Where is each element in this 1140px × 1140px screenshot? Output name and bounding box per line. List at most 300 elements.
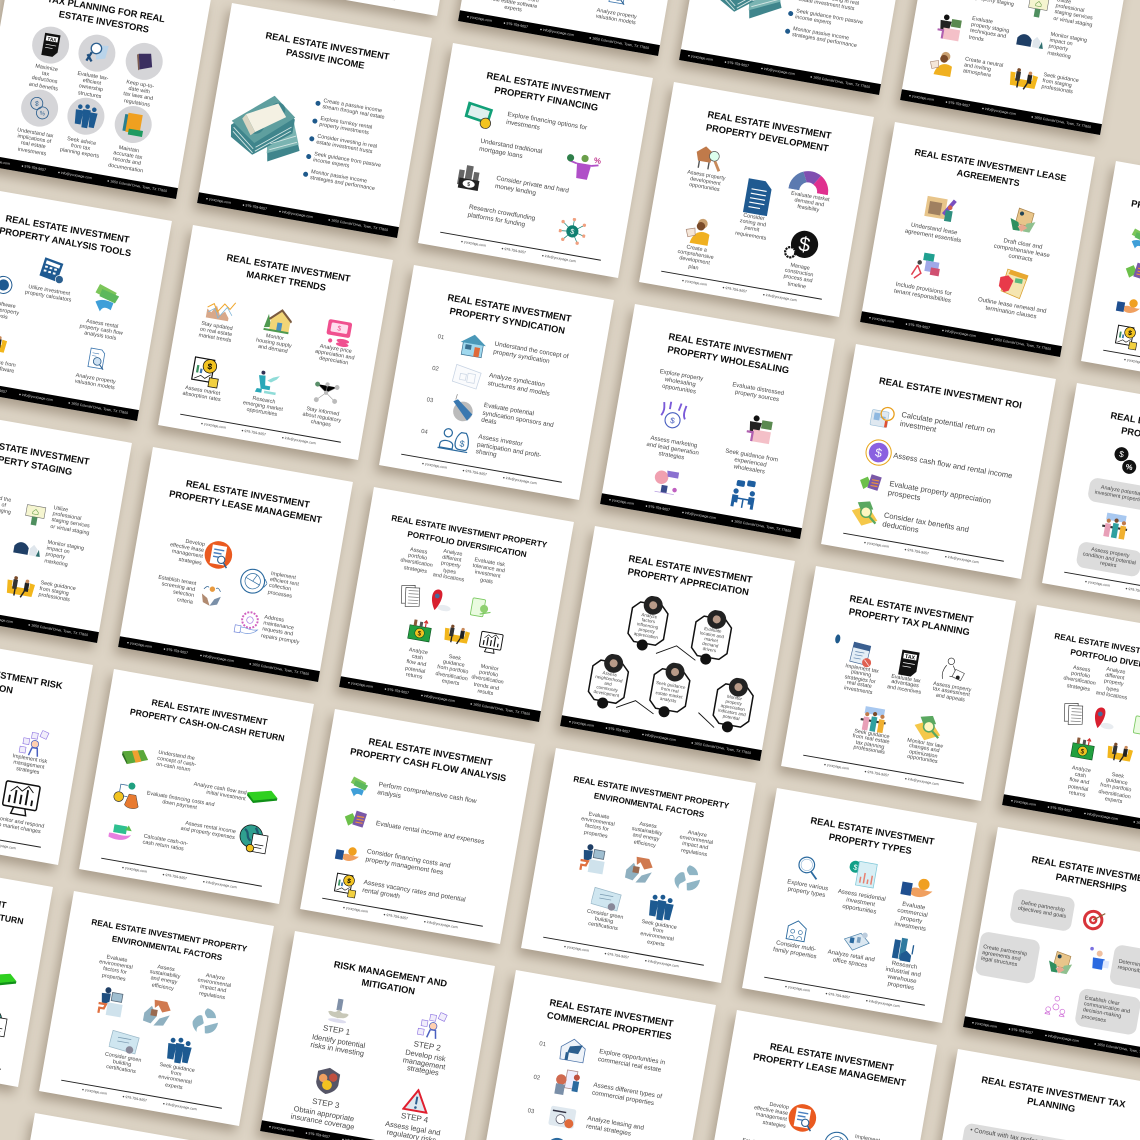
title [327, 728, 531, 788]
footer: ● 1650 Colonial Drive, Town, TX 77800 [107, 178, 167, 193]
text: warehouse: industrial and [885, 966, 921, 978]
text: cash flow: Assess cash flow and rental income [892, 450, 1013, 480]
card: property syndication [379, 265, 613, 499]
text: tax implications: Understand tax [17, 127, 54, 139]
text: monitor staging: Monitor staging impact on property marketing [1046, 31, 1087, 59]
text: tenant screening: criteria [176, 597, 193, 605]
text: renewal clauses: termination clauses [985, 305, 1037, 320]
card: property staging, top crop [900, 0, 1134, 134]
title: RISK MANAGEMENT AND [333, 959, 448, 988]
text: office spaces: office spaces [832, 957, 867, 969]
footer: ● info@yourpage.com [502, 475, 537, 485]
text: wholesaling opportunities: wholesaling [664, 377, 696, 388]
title: ESTATE INVESTORS [58, 8, 150, 34]
text: evaluate factors: environmental [580, 816, 615, 828]
footer [59, 1080, 222, 1119]
text: initial investment: initial investment [205, 790, 245, 803]
footer [320, 897, 482, 936]
footer: ● 979-759-9057 [904, 547, 929, 555]
icon: lease collage [922, 192, 958, 225]
text: tenant screening: selection [172, 590, 194, 599]
footer: ● yourpage.com [82, 1087, 107, 1096]
text: tax laws [123, 79, 155, 108]
text: residential [832, 888, 888, 917]
icon: coin stacks [457, 165, 480, 191]
icon disc [112, 103, 155, 145]
text: risk management: strategies [15, 766, 39, 776]
text: emerging: opportunities [245, 407, 277, 418]
text: insurance: Obtain appropriate [293, 1103, 355, 1123]
card: tax planning, bottom right [923, 1049, 1140, 1140]
icon: house [261, 306, 293, 336]
title: PROPERTY DEVELOPMENT [705, 122, 829, 153]
text: evaluate factors: Evaluate [106, 954, 128, 964]
title [106, 689, 310, 749]
text: cash flow returns [399, 646, 434, 681]
text: strategies: Assess [1073, 665, 1091, 674]
text: leasing: Analyze leasing and [587, 1115, 644, 1132]
text: construction [783, 262, 814, 290]
text: planning experts: Seek advice [67, 136, 96, 147]
footer: ● 1650 Colonial Drive, Town, TX 77800 [991, 336, 1051, 351]
icon: step 3 [311, 1064, 344, 1097]
text: zoning: Consider [743, 213, 765, 222]
icon: monitor [0, 776, 42, 820]
card: cash-on-cash return, left edge [0, 852, 53, 1086]
text: tenant responsibilities [886, 280, 960, 306]
card: property lease management, bottom [702, 1010, 937, 1140]
text: explore types [781, 878, 832, 900]
text: construction: timeline [787, 281, 806, 290]
card: commercial properties [481, 970, 716, 1140]
text: deductions: Maximize [35, 63, 58, 73]
icon: blue person [1084, 943, 1112, 973]
title [406, 284, 610, 344]
text: comprehensive analysis: analysis [376, 788, 401, 799]
footer: ● yourpage.com [908, 93, 934, 101]
text: market trends: on real estate [199, 327, 232, 338]
icon: handshake [1045, 949, 1075, 979]
title: REAL ESTATE INVESTMENT [4, 213, 130, 244]
text: cash flow returns: returns [405, 671, 423, 680]
title: PROPERTY TYPES [828, 831, 912, 855]
text: tax laws: regulations [123, 97, 150, 108]
text: comprehensive analysis [376, 781, 487, 815]
icon: clock gear [237, 565, 270, 598]
text: sustainability [144, 962, 185, 993]
text: passive income experts: Seek guidance from passive income experts [794, 8, 863, 27]
text: monitor passive income: Monitor passive income strategies and performance [791, 26, 857, 49]
icon: coin chart [1111, 323, 1140, 352]
card: property analysis tools [0, 186, 171, 420]
title: REAL ESTATE INVESTMENT ROI [878, 375, 1022, 410]
icon: pink bill [322, 317, 354, 349]
node 4 [645, 659, 694, 721]
footer: ● info@yourpage.com [279, 209, 313, 219]
text: experts: experts [646, 939, 665, 948]
text: rent collection: Implement [270, 571, 296, 581]
text: types: different [1105, 673, 1125, 682]
text: risk tolerance: investment [474, 569, 501, 580]
icon: pin [1089, 704, 1118, 732]
text: cash flow returns: Analyze cash [408, 647, 428, 661]
text: office spaces [822, 948, 878, 971]
footer: ● info@yourpage.com [539, 27, 574, 37]
footer: ● yourpage.com [269, 1124, 294, 1132]
text: risk management: Implement risk [12, 753, 47, 765]
text: tax laws: tax laws and [123, 91, 153, 102]
text: regulatory: Stay informed [305, 406, 339, 418]
title: MITIGATION [361, 977, 416, 996]
text: sustainability: efficiency [151, 982, 174, 992]
icon: bills and arrow [1127, 227, 1140, 252]
bullet [315, 100, 321, 106]
footer [900, 89, 1101, 134]
text: ownership: structures [77, 89, 102, 99]
icon: recycle [139, 995, 176, 1032]
icon: sofa [1010, 68, 1038, 90]
icon: pink group [1042, 992, 1069, 1020]
icon: hands gears [197, 582, 225, 610]
title: ENVIRONMENTAL FACTORS [593, 791, 704, 819]
text: experts: experts [165, 1082, 183, 1091]
footer: ● yourpage.com [824, 762, 849, 770]
icon: recycle [620, 852, 657, 889]
footer: ● yourpage.com [971, 1021, 997, 1029]
icon: orange books [122, 112, 143, 137]
text: vacancy rates: rental growth [361, 886, 400, 899]
text: staging techniques: Evaluate property staging techniques and trends [968, 15, 1009, 42]
text: participation: Assess investor participation and profit-sharing [475, 433, 541, 458]
text: tenant responsibilities: Include provisions for [895, 281, 952, 297]
icon: office [840, 925, 872, 956]
footer [260, 1120, 462, 1140]
footer: ● yourpage.com [569, 720, 594, 728]
footer: ● info@yourpage.com [762, 293, 797, 302]
text: sustainability: efficiency [633, 839, 656, 849]
text: wholesalers: experienced [733, 457, 767, 469]
footer: ● 1650 Colonial Drive, Town, TX 77800 [1030, 114, 1091, 129]
title: REAL ESTATE INVESTMENT [849, 593, 974, 624]
text: ownership: Evaluate tax- [77, 70, 109, 82]
text: diversification strategies: Assess [410, 546, 428, 555]
text: experts: environmental [639, 931, 674, 943]
text: financing costs [364, 848, 475, 882]
text: sustainability: Assess [638, 821, 657, 830]
text: experts: from portfolio [1100, 783, 1132, 794]
bullet [784, 28, 790, 34]
text: returns: Analyze cash [1071, 765, 1091, 780]
icon: money stacks [720, 0, 782, 18]
icon: hand coin [333, 843, 360, 867]
text: diversification experts [433, 652, 472, 688]
text: essentials: agreement essentials [904, 228, 961, 244]
text: agreements: Create partnership agreements and legal structures [980, 944, 1027, 968]
footer: ● info@yourpage.com [58, 170, 92, 180]
footer: ● 979-759-9057 [384, 686, 409, 695]
text: evaluate factors: Evaluate [588, 811, 609, 821]
footer: ● yourpage.com [206, 197, 231, 205]
footer [0, 1040, 1, 1079]
footer: ● info@yourpage.com [865, 998, 900, 1008]
footer: ● 979-759-9057 [604, 951, 629, 960]
icon disc [123, 40, 166, 82]
icon: sofa [0, 329, 8, 356]
text: opportunities: commercial real estate [597, 1056, 662, 1073]
title [0, 871, 50, 931]
card: property lease management [118, 447, 353, 682]
text: absorption: absorption rates [181, 391, 221, 403]
text: leasing: rental strategies [586, 1123, 632, 1137]
icon: tax doc [892, 647, 925, 679]
footer: ● 979-759-9057 [305, 1130, 330, 1139]
icon: orange disc [786, 1101, 819, 1134]
footer: ● 979-759-9057 [21, 163, 46, 172]
icon: green bill [0, 968, 18, 990]
text: trusts: Consider investing in real estate investment trusts [316, 134, 377, 155]
text: experts: environmental [158, 1074, 192, 1086]
footer [399, 453, 561, 492]
text: planning experts: planning experts [59, 147, 99, 160]
footer [541, 937, 703, 976]
title: ENVIRONMENTAL FACTORS [111, 934, 223, 962]
text: deductions: tax [41, 70, 50, 78]
text: types: commercial properties [591, 1089, 655, 1107]
text: tenant screening: Establish tenant [158, 575, 197, 587]
text: evaluate factors: properties [583, 829, 608, 839]
footer [1002, 794, 1140, 840]
text: draft contracts: Draft clear and [1003, 238, 1043, 250]
text: valuation models: Analyze property valuation models [595, 7, 637, 26]
text: market demand: feasibility [797, 204, 820, 214]
text: evaluate factors: environmental [99, 959, 133, 971]
icon: tenant docs [909, 249, 944, 284]
icon: yellow magnifier [911, 712, 945, 744]
text: construction: Manage [790, 262, 810, 272]
icon: dollar percent [30, 97, 49, 120]
footer: ● yourpage.com [200, 421, 226, 430]
icon: green bills [119, 745, 150, 769]
text: certifications: certifications [587, 921, 618, 932]
footer [0, 153, 178, 198]
text: risk tolerance [469, 556, 507, 587]
text: assess opportunities: development [690, 176, 721, 187]
title: REAL ESTATE INVESTMENT [225, 252, 351, 284]
title [1069, 403, 1140, 463]
icon: desk worker [741, 413, 776, 448]
icon: magnifier [794, 853, 822, 881]
text: lease strategies: strategies [178, 556, 202, 566]
heading: step 3: STEP 3 [311, 1096, 340, 1110]
footer: ● 979-759-9057 [722, 285, 747, 294]
text: experts [636, 919, 678, 950]
text: diversification strategies: strategies [403, 564, 427, 574]
title: REAL ESTATE INVESTMENT PROPERTY [91, 918, 248, 954]
text: financing costs: Consider financing costs and [366, 848, 450, 869]
title [0, 649, 89, 709]
footer: ● yourpage.com [563, 944, 589, 953]
number 02: 02 [431, 365, 439, 372]
text: marketing: Assess marketing [649, 435, 697, 449]
text: lease strategies: effective lease [169, 542, 204, 554]
text: multi-family: family properties [772, 946, 816, 960]
text: market demand: Evaluate market [791, 191, 830, 203]
text: strategies: effective lease [753, 1105, 788, 1117]
text: experts: from [170, 1070, 182, 1078]
card: tax planning for real estate investors [0, 0, 211, 198]
text: tax records: records and [112, 156, 141, 167]
footer: ● 979-759-9057 [162, 872, 187, 881]
text: node 1: Analyze factors influencing property appreciation [633, 612, 659, 640]
footer: ● 979-759-9057 [825, 991, 850, 999]
text: cash flow tools: Assess rental property cash flow analysis tools [79, 318, 123, 342]
text: experts: experts [1104, 796, 1123, 805]
text: marketing: strategies [658, 451, 684, 461]
icon: bills and calculator [856, 471, 883, 495]
number 03: 03 [426, 397, 433, 404]
text: strategies: management [755, 1111, 787, 1123]
text: condition: Assess property condition and potential repairs [1082, 547, 1136, 570]
text: impact: regulations [199, 990, 226, 1001]
text: multi-family [769, 939, 821, 961]
footer: ● 979-759-9057 [503, 20, 528, 29]
title: REAL ESTATE INVESTMENT TAX [981, 1075, 1126, 1110]
footer: ● 1650 Colonial Drive, Town, TX 77800 [470, 701, 530, 716]
footer: ● info@yourpage.com [642, 732, 676, 742]
title: PROPERTY SYNDICATION [448, 305, 565, 335]
box: agreements [974, 931, 1040, 985]
icon: investor and money bag [435, 423, 473, 455]
text: legal risks [376, 1118, 448, 1140]
text: certifications: certifications [106, 1064, 136, 1075]
title [728, 1033, 933, 1093]
icon: papers [1059, 700, 1088, 728]
text: monitor results: results [477, 688, 494, 696]
text: diversification experts: experts [441, 677, 460, 686]
text: types: Analyze [1106, 666, 1126, 676]
text: identify risks: risks in investing [310, 1039, 365, 1057]
card: property tax planning [781, 566, 1016, 800]
footer: ● 979-759-9057 [945, 99, 970, 108]
text: develop strategies: management [402, 1054, 446, 1071]
footer: ● info@yourpage.com [981, 106, 1016, 116]
text: tax benefits: Consider tax benefits and deductions [881, 510, 969, 534]
text: rent collection [267, 571, 309, 602]
text: certifications [582, 908, 625, 933]
text: appreciation [312, 343, 356, 368]
text: sustainability: and energy [150, 976, 178, 986]
title [508, 990, 713, 1050]
text: impact: Analyze [687, 830, 707, 839]
footer: ● 979-759-9057 [122, 1094, 147, 1103]
icon: silhouettes [644, 891, 677, 924]
text: property types: and locations [432, 571, 465, 583]
text: monitor results [468, 662, 507, 698]
text: certifications: building [594, 916, 613, 925]
title: PROPERTY APPRECIATION [627, 566, 750, 597]
text: node 4: Seek guidance from real estate market analysts [655, 680, 686, 704]
icon: book [137, 54, 152, 70]
icon: pale plan [450, 361, 484, 392]
text: maintenance: maintenance [263, 620, 294, 632]
icon: man with paper [938, 655, 968, 685]
footer: ● yourpage.com [863, 540, 889, 548]
text: returns: returns [1068, 790, 1086, 798]
text: emerging: emerging market [242, 400, 283, 413]
text: draft contracts: comprehensive lease [993, 243, 1050, 259]
footer: ● yourpage.com [466, 14, 492, 22]
footer: ● 979-759-9057 [905, 321, 930, 330]
text: impact [193, 971, 234, 1002]
text: property types: property types [440, 560, 461, 575]
connector [696, 713, 716, 728]
text: warehouse: Research [891, 960, 917, 970]
title: PORTFOLIO DIVERSIFICATION [407, 529, 527, 559]
text: impact: impact and [681, 841, 708, 852]
text: absorption: Assess market [184, 385, 220, 397]
text: concept: concept of cash- [156, 756, 196, 768]
node 5 [709, 674, 758, 737]
footer: ● info@yourpage.com [1084, 811, 1118, 821]
text: regulatory [298, 405, 344, 431]
footer: ● info@yourpage.com [18, 392, 53, 402]
text: risk tolerance: tolerance and [472, 563, 505, 574]
card: market trends [158, 225, 392, 460]
footer: ● yourpage.com [421, 461, 447, 469]
text: impact: Analyze [205, 973, 225, 982]
text: diversification experts: diversification [435, 670, 468, 682]
text: planning experts [59, 136, 99, 160]
footer: ● 979-759-9057 [645, 504, 670, 512]
title [547, 770, 752, 830]
footer: ● 1650 Colonial Drive, Town, TX 77800 [67, 400, 128, 415]
text: diversification strategies: portfolio [408, 552, 427, 561]
text: passive experts: Seek guidance from passive income experts [313, 151, 381, 170]
card: partnerships [963, 827, 1140, 1062]
title: REAL ESTATE INVESTMENT [265, 30, 390, 62]
text: evaluate factors [576, 810, 618, 841]
text: strategies: portfolio [1071, 671, 1090, 680]
number 02: 02 [533, 1075, 540, 1082]
footer: ● yourpage.com [784, 984, 810, 992]
text: impact: environmental [678, 834, 713, 846]
text: renewal clauses: Outline lease renewal and [977, 297, 1047, 314]
node 2 [687, 607, 736, 669]
text: strategies [744, 1097, 789, 1129]
text: market trends: market trends [198, 333, 231, 344]
text: wholesaling opportunities [652, 368, 707, 398]
text: housing supply: housing supply [255, 338, 292, 350]
title: MARKET TRENDS [245, 269, 326, 293]
icon: shield document [996, 266, 1030, 301]
card: risk mitigation, left edge [0, 630, 92, 864]
card: portfolio diversification, right edge [1002, 605, 1140, 840]
card: environmental factors, bottom left [39, 891, 274, 1126]
text: rental income [174, 819, 236, 841]
icon: purple coin [862, 436, 894, 468]
card: property types [742, 788, 976, 1022]
text: return ratios: cash return ratios [142, 840, 184, 853]
text: explore types: Explore various [786, 879, 828, 892]
text: appreciation: appreciation and [314, 349, 354, 362]
footer: ● 1650 Colonial Drive, Town, TX 77800 [588, 35, 649, 50]
text: professional staging: Utilize professional staging services or virtual staging [50, 505, 90, 536]
bullet [312, 118, 318, 124]
footer: ● 1650 Colonial Drive, Town, TX 77800 [730, 519, 791, 533]
text: essentials: Understand lease [910, 222, 958, 236]
footer: ● yourpage.com [869, 315, 894, 323]
text: rent collection: processes [267, 589, 292, 599]
